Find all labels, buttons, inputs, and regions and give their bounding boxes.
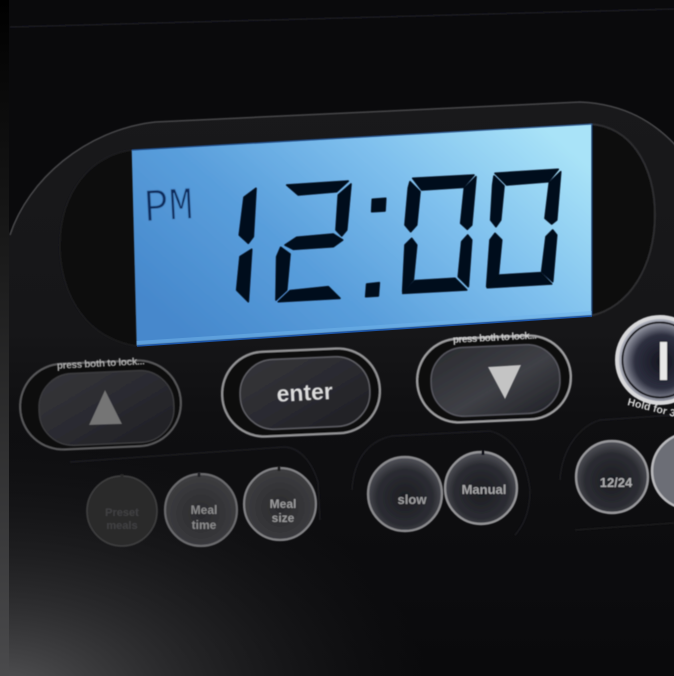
icon: down triangle [488,365,521,399]
digit 1 [237,188,256,302]
icon: up triangle [89,390,122,425]
icon: power bar [660,342,667,380]
digit 0 tens [403,175,476,293]
button: preset meals: Preset [105,507,139,519]
digit 0 units [487,169,561,288]
button: meal time [165,472,237,546]
button: meal size [244,466,316,540]
button: manual: Manual [462,482,506,497]
button: preset meals [87,474,157,546]
label: enter: enter [276,378,333,407]
button: up arrow [18,356,183,451]
digit 2 [276,181,351,302]
colon [366,198,386,297]
button: 12/24: 12/24 [600,475,633,490]
button: preset meals: meals [106,520,138,532]
button: partial right [652,433,674,509]
label: press both to lock: press both to lock... [57,356,145,372]
label: PM: PM [143,180,195,235]
button: meal size: size [272,511,295,525]
button: slow: slow [398,492,427,507]
right bezel lobe [590,124,655,316]
button: meal time: time [192,518,217,532]
button: meal time: Meal [191,503,217,517]
button groups outlines [70,415,674,535]
LCD screen [132,124,592,346]
label: press both to lock: press both to lock... [453,331,537,346]
button: power [617,317,674,420]
left bezel lobe [60,150,137,346]
button: 12/24 [576,441,648,513]
button: down arrow [415,331,573,424]
button: meal size: Meal [270,497,296,511]
button: manual [445,450,517,524]
button: slow [368,457,442,531]
button: enter [220,347,382,438]
time digits: 12:00 [237,169,561,302]
